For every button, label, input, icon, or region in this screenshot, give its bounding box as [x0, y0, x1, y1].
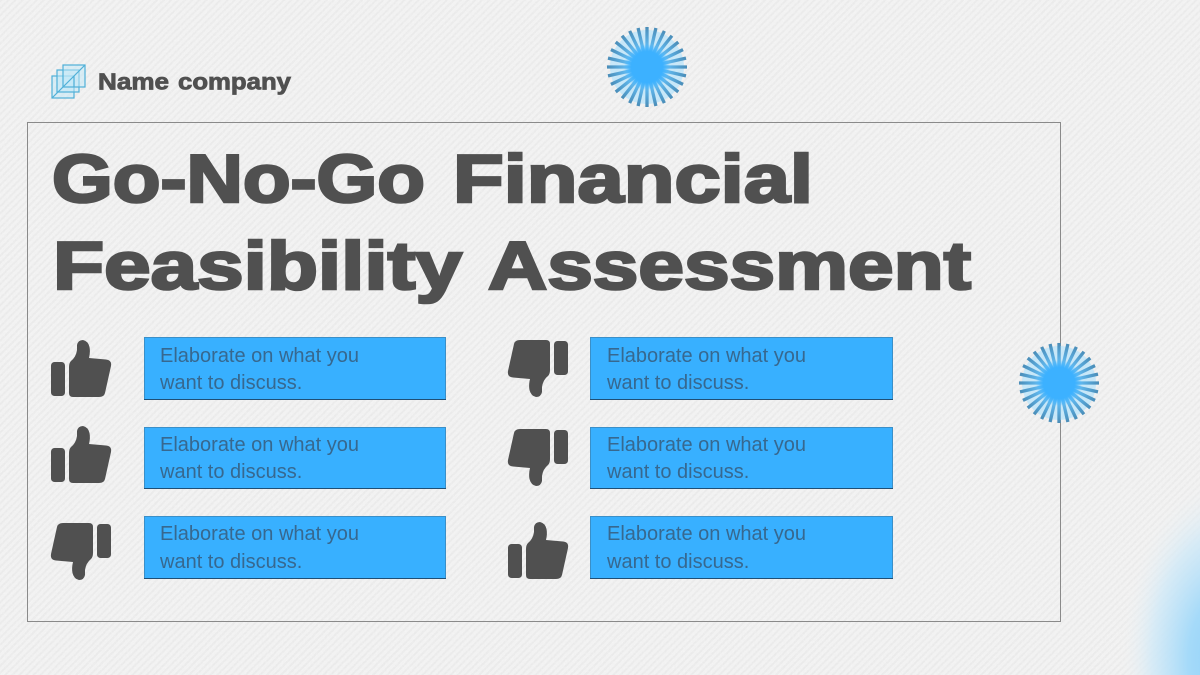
item: left row 3: Elaborate on what you	[160, 523, 359, 545]
item: left row 1	[144, 338, 446, 400]
company name	[98, 68, 291, 94]
item: left row 2: Elaborate on what you	[160, 434, 359, 456]
item: left row 1: want to discuss.	[159, 372, 302, 394]
title: Feasibility	[53, 228, 462, 304]
item: left row 2	[144, 428, 446, 488]
icon: sunburst right	[1019, 343, 1099, 423]
item: right row 1: want to discuss.	[606, 372, 749, 394]
item: right row 3: want to discuss.	[606, 551, 749, 573]
icon: thumbs up row 3 right	[508, 522, 568, 579]
frame panel	[28, 122, 1060, 622]
title	[52, 141, 971, 304]
item: right row 1: Elaborate on what you	[607, 345, 806, 367]
icon: thumbs up row 2 left	[51, 426, 111, 483]
item: left row 1: Elaborate on what you	[160, 345, 359, 367]
title: Go-No-Go	[52, 141, 425, 217]
item: left row 3	[144, 516, 446, 578]
icon: company logo cubes	[52, 65, 85, 98]
icon: thumbs down row 3 left	[51, 523, 111, 580]
item: right row 2: want to discuss.	[606, 461, 749, 483]
item: right row 2	[590, 428, 893, 488]
item: right row 2: Elaborate on what you	[607, 434, 806, 456]
title: Assessment	[488, 228, 971, 304]
icon: thumbs up row 1 left	[51, 340, 111, 397]
title: Financial	[453, 141, 813, 217]
item: right row 3: Elaborate on what you	[607, 523, 806, 545]
company name: company	[178, 68, 291, 94]
company name: Name	[98, 68, 169, 94]
icon: sunburst top	[607, 27, 687, 107]
icon: thumbs down row 1 right	[508, 340, 568, 397]
item: left row 2: want to discuss.	[159, 461, 302, 483]
item: right row 1	[590, 338, 893, 400]
item: left row 3: want to discuss.	[159, 551, 302, 573]
icon: thumbs down row 2 right	[508, 429, 568, 486]
item: right row 3	[590, 516, 893, 578]
